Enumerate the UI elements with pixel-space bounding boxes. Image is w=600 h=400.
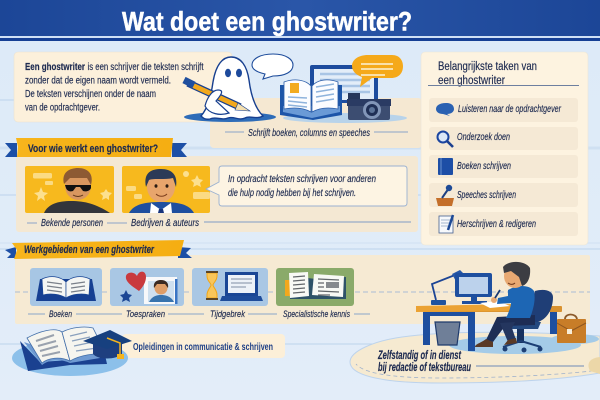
tile: Toespraken — [110, 268, 184, 306]
camera — [347, 93, 391, 120]
paper — [480, 301, 510, 308]
lamp base — [431, 300, 446, 305]
task: Herschrijven: Herschrijven & redigeren — [457, 218, 536, 230]
monitor — [455, 273, 492, 304]
briefcase — [557, 314, 586, 343]
label: Specialistische kennis: Specialistische kennis — [283, 309, 350, 320]
wastebasket — [435, 322, 460, 345]
panel: for whom — [16, 156, 418, 232]
ribbon: Voor wie werkt — [5, 138, 187, 157]
task: Boeken: Boeken schrijven — [457, 160, 511, 172]
definition text: van de opdrachtgever. — [25, 102, 100, 114]
person — [475, 262, 535, 347]
label text: Zelfstandig of in dienst — [377, 350, 462, 362]
tile: Boeken — [30, 268, 102, 306]
definition text: De teksten verschijnen onder de naam — [25, 89, 156, 100]
ribbon: Voor wie werkt: Voor wie werkt een ghostwriter? — [28, 143, 158, 155]
desk — [416, 304, 562, 351]
panel: independent or employed — [350, 332, 600, 383]
open book — [280, 80, 342, 120]
panel: main tasks — [421, 52, 588, 245]
title banner — [0, 0, 600, 41]
task: Speeches — [429, 183, 578, 207]
panel: work areas — [15, 255, 590, 324]
chat bubble — [352, 55, 403, 87]
label text: bij redactie of tekstbureau — [378, 362, 471, 374]
label: Boeken: Boeken — [49, 309, 72, 320]
definition text: is een schrijver die teksten schrijft — [88, 62, 204, 73]
definition text: zonder dat de eigen naam wordt vermeld. — [25, 76, 171, 86]
caption: Schrijft boeken, columns en speeches: Schrijft boeken, columns en speeches — [248, 127, 371, 139]
label: Tijdgebrek: Tijdgebrek — [210, 309, 246, 320]
lamp — [432, 275, 455, 300]
task: Onderzoek — [429, 127, 578, 150]
icon: open book with graduation cap — [12, 327, 132, 376]
tile: Tijdgebrek — [192, 268, 268, 306]
label: Opleidingen — [122, 334, 285, 358]
task: Onderzoek: Onderzoek doen — [457, 131, 510, 143]
task: Boeken — [429, 155, 578, 178]
label: Toespraken: Toespraken — [126, 309, 165, 320]
panel heading — [438, 61, 537, 87]
callout: In opdracht teksten schrijven voor anderen — [228, 174, 376, 185]
tile: Bekende personen — [25, 166, 114, 213]
title: Wat doet een ghostwriter? — [122, 6, 412, 36]
task: Luisteren — [429, 98, 578, 122]
label: Bekende personen: Bekende personen — [41, 218, 103, 229]
monitor — [310, 65, 378, 103]
definition text — [25, 62, 204, 114]
callout — [206, 166, 407, 206]
label text — [377, 350, 471, 374]
tile: Bedrijven en auteurs — [122, 166, 210, 213]
task: Speeches: Speeches schrijven — [457, 189, 516, 201]
callout: die hulp nodig hebben bij het schrijven. — [228, 188, 356, 199]
tile: Specialistische kennis — [276, 268, 354, 306]
label: Opleidingen: Opleidingen in communicatie & schrijven — [133, 341, 273, 353]
lamp head — [452, 270, 468, 285]
ribbon: Werkgebieden: Werkgebieden van een ghostwriter — [24, 244, 155, 256]
definition text: Een ghostwriter — [25, 62, 85, 73]
ribbon: Werkgebieden — [5, 240, 192, 259]
illustration: writer at desk — [416, 262, 599, 354]
label: Bedrijven en auteurs: Bedrijven & auteurs — [131, 218, 199, 229]
panel: definition — [14, 52, 232, 122]
task: Herschrijven — [429, 212, 578, 236]
panel heading: Belangrijkste taken van — [438, 61, 537, 73]
panel heading: een ghostwriter — [438, 75, 505, 87]
panel: caption Schrijft boeken — [210, 98, 422, 148]
decorative corner — [588, 357, 600, 374]
chair — [499, 290, 553, 352]
icon: speech bubble — [252, 54, 293, 79]
icon: ghost with pencil — [184, 57, 276, 122]
icon: open book, monitor, chat and camera — [280, 55, 407, 123]
